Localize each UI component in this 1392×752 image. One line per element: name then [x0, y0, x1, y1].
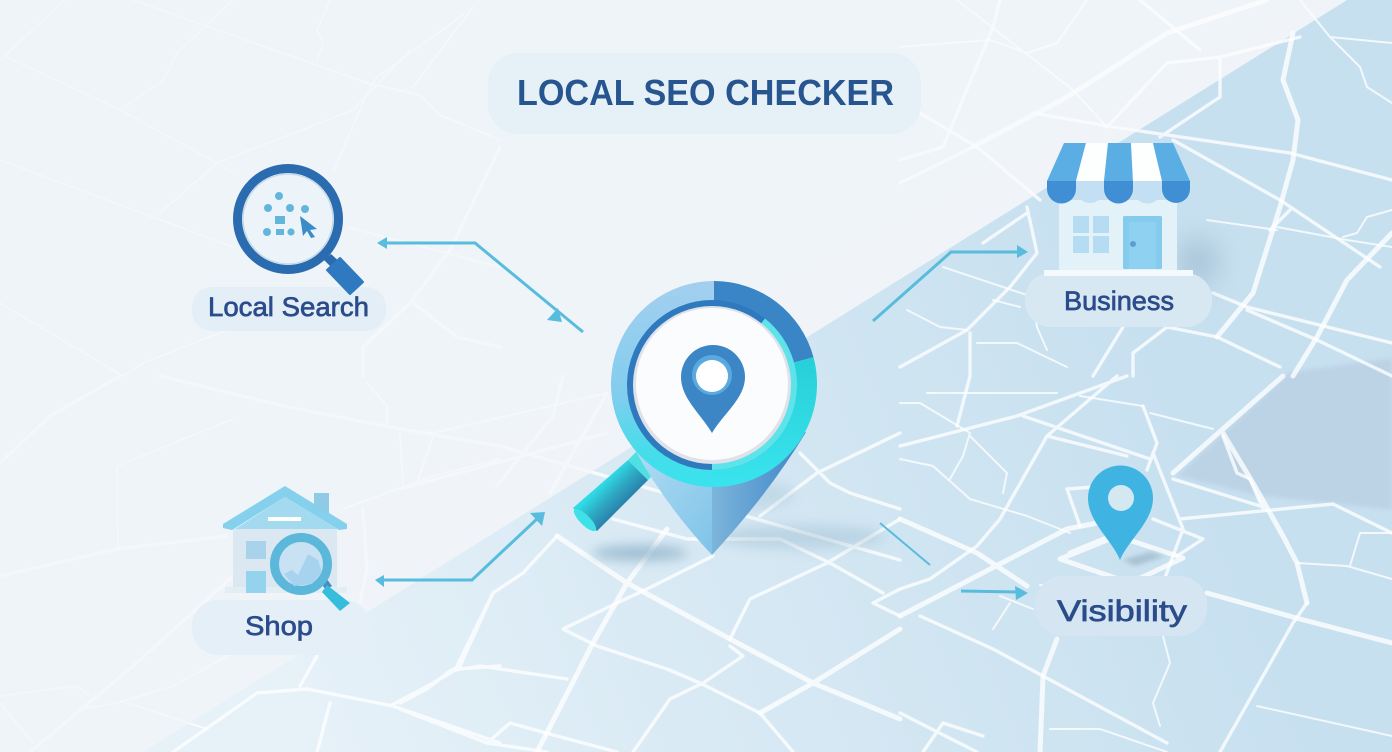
node: shop [192, 486, 370, 655]
title text: LOCAL SEO CHECKER [517, 72, 894, 113]
label text: Shop [245, 611, 313, 641]
title pill [488, 53, 921, 134]
arrow: to visibility [880, 523, 1028, 600]
pin body [634, 432, 806, 555]
node: business [1025, 143, 1218, 327]
node: visibility [1035, 466, 1207, 636]
label pill [1035, 576, 1207, 636]
label text: Business [1064, 286, 1174, 316]
node: local search [192, 168, 386, 331]
arrow: to local search [377, 237, 583, 332]
magnifier handle [571, 452, 656, 534]
arrow: to business [873, 245, 1028, 321]
inner location pin [681, 345, 745, 433]
label pill [1025, 273, 1212, 327]
icon: location pin [1088, 466, 1153, 560]
store shadow [1178, 238, 1218, 286]
label pill [192, 287, 386, 331]
outer ring [611, 281, 817, 487]
white lens center [636, 308, 788, 460]
arrow: to shop [375, 512, 545, 587]
icon: house with magnifier [223, 486, 350, 611]
label text: Visibility [1057, 595, 1187, 628]
icon: magnifier with cursor [238, 168, 363, 294]
central pin shadows [592, 481, 885, 560]
white lens [633, 306, 791, 464]
label text: Local Search [208, 292, 369, 322]
pin shadow [1122, 552, 1165, 566]
icon: storefront [1044, 143, 1193, 276]
label pill [192, 600, 370, 655]
inner ring [627, 300, 797, 470]
icon: central map pin with magnifier [571, 281, 817, 555]
